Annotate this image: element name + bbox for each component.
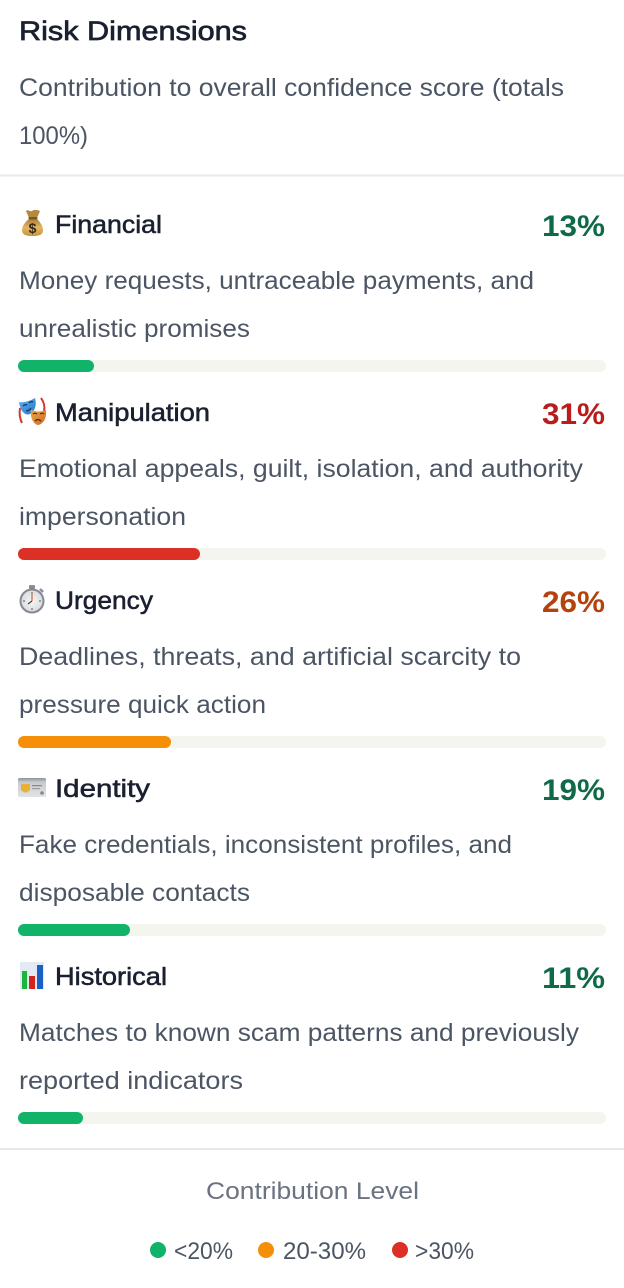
description: pressure quick action [19, 691, 266, 719]
description: disposable contacts [19, 879, 250, 907]
description [19, 1019, 580, 1095]
subtitle: Contribution to overall confidence score (totals [19, 74, 564, 102]
label: Manipulation [55, 399, 210, 427]
description [19, 455, 584, 531]
percentage: 11% [542, 962, 605, 995]
icon: theater masks [19, 398, 46, 425]
row: urgency [18, 585, 606, 748]
header [19, 16, 564, 150]
description: unrealistic promises [19, 315, 250, 343]
description: Money requests, untraceable payments, and [19, 267, 534, 295]
description: impersonation [19, 503, 186, 531]
row: manipulation [18, 398, 606, 560]
legend title: Contribution Level [206, 1178, 419, 1205]
row: identity [18, 774, 606, 936]
icon: bar chart [20, 962, 44, 989]
label: Identity [55, 775, 151, 803]
icon: identification card [18, 778, 46, 797]
description: Emotional appeals, guilt, isolation, and authority [19, 455, 584, 483]
icon: stopwatch [20, 585, 44, 612]
progress bar [18, 736, 606, 748]
description: Fake credentials, inconsistent profiles, and [19, 831, 512, 859]
progress bar [18, 924, 606, 936]
legend item: 20 to 30%: 20-30% [283, 1238, 366, 1265]
progress bar [18, 360, 606, 372]
percentage: 26% [542, 586, 605, 619]
icon: money bag [22, 210, 43, 236]
percentage: 13% [542, 210, 605, 243]
description [19, 831, 512, 907]
row: historical [18, 962, 606, 1124]
percentage: 31% [542, 398, 605, 431]
description [19, 643, 521, 719]
legend item: over 30% [392, 1238, 474, 1265]
icon: money bag: $ [29, 220, 37, 236]
legend item: over 30%: >30% [415, 1238, 474, 1265]
subtitle second line: 100%) [19, 122, 88, 150]
label: Urgency [55, 587, 154, 615]
progress bar [18, 1112, 606, 1124]
description: Deadlines, threats, and artificial scarcity to [19, 643, 521, 671]
label: Financial [55, 211, 162, 239]
description: reported indicators [19, 1067, 243, 1095]
legend item: under 20% [150, 1238, 233, 1265]
progress bar [18, 548, 606, 560]
legend [150, 1178, 474, 1265]
row: financial [18, 210, 606, 372]
percentage: 19% [542, 774, 605, 807]
description: Matches to known scam patterns and previously [19, 1019, 580, 1047]
description [19, 267, 534, 343]
legend item: under 20%: <20% [174, 1238, 233, 1265]
title: Risk Dimensions [19, 16, 247, 46]
label: Historical [55, 963, 167, 991]
